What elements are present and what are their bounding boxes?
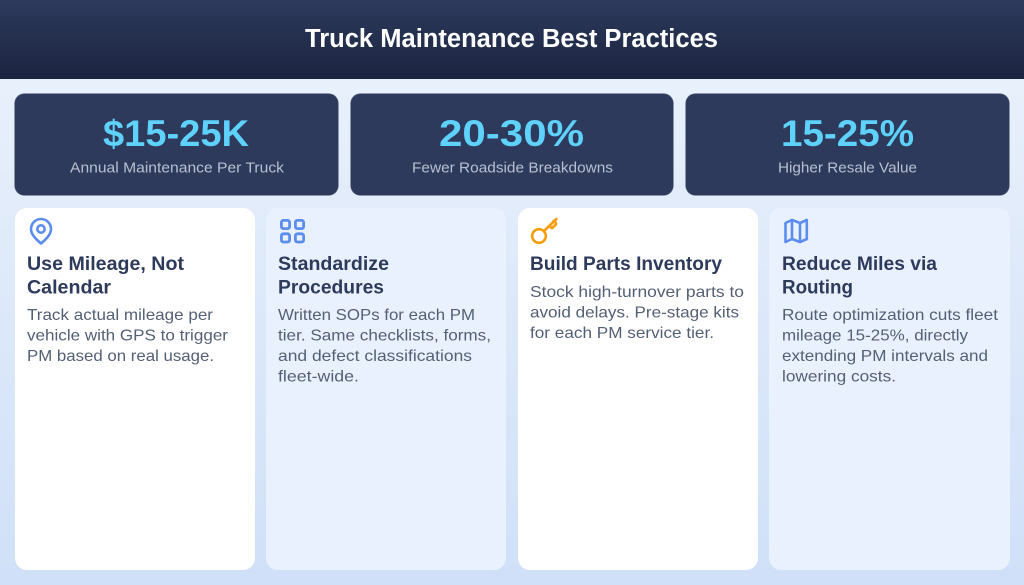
header banner (0, 0, 1024, 79)
heading: Calendar (27, 278, 112, 298)
body text: mileage 15-25%, directly (782, 328, 968, 344)
heading (27, 254, 185, 298)
icon: map (786, 220, 807, 242)
stat value: 15-25% (781, 113, 914, 154)
panel: use mileage (15, 208, 255, 570)
heading: Standardize (278, 254, 389, 275)
body text: Track actual mileage per (27, 307, 213, 324)
panel: parts inventory (518, 208, 758, 570)
heading: Routing (782, 278, 853, 298)
stat card: fewer breakdowns (350, 94, 674, 196)
body text (782, 307, 999, 386)
body text (278, 307, 491, 386)
body text: avoid delays. Pre-stage kits (530, 304, 739, 322)
body text: tier. Same checklists, forms, (278, 328, 491, 344)
body text (27, 307, 228, 365)
body text: for each PM service tier. (530, 325, 714, 342)
stat label: Annual Maintenance Per Truck (70, 160, 285, 176)
stat label: Fewer Roadside Breakdowns (412, 160, 613, 176)
title: Truck Maintenance Best Practices (305, 25, 718, 53)
icon: grid (281, 220, 304, 242)
body text: Stock high-turnover parts to (530, 284, 744, 301)
body text: extending PM intervals and (782, 348, 988, 365)
stat card: resale value (686, 94, 1010, 196)
heading: Procedures (278, 278, 384, 298)
heading (278, 254, 389, 298)
body text: lowering costs. (782, 368, 896, 386)
body text: PM based on real usage. (27, 348, 214, 365)
icon: map pin (31, 219, 51, 244)
icon: key (532, 219, 556, 243)
stat card: annual maintenance (14, 94, 338, 196)
body text: vehicle with GPS to trigger (27, 328, 228, 344)
body text: Route optimization cuts fleet (782, 307, 999, 324)
body text (530, 284, 744, 342)
heading (782, 254, 937, 298)
panel: reduce miles (769, 208, 1010, 570)
heading: Reduce Miles via (782, 254, 937, 275)
body text: Written SOPs for each PM (278, 307, 475, 324)
body text: fleet-wide. (278, 368, 359, 386)
stat value: 20-30% (439, 113, 584, 154)
stat value: $15-25K (103, 113, 249, 154)
heading: Use Mileage, Not (27, 254, 185, 275)
heading: Build Parts Inventory (530, 254, 722, 275)
panel: standardize procedures (266, 208, 506, 570)
stat label: Higher Resale Value (778, 160, 917, 176)
body text: and defect classifications (278, 348, 472, 365)
